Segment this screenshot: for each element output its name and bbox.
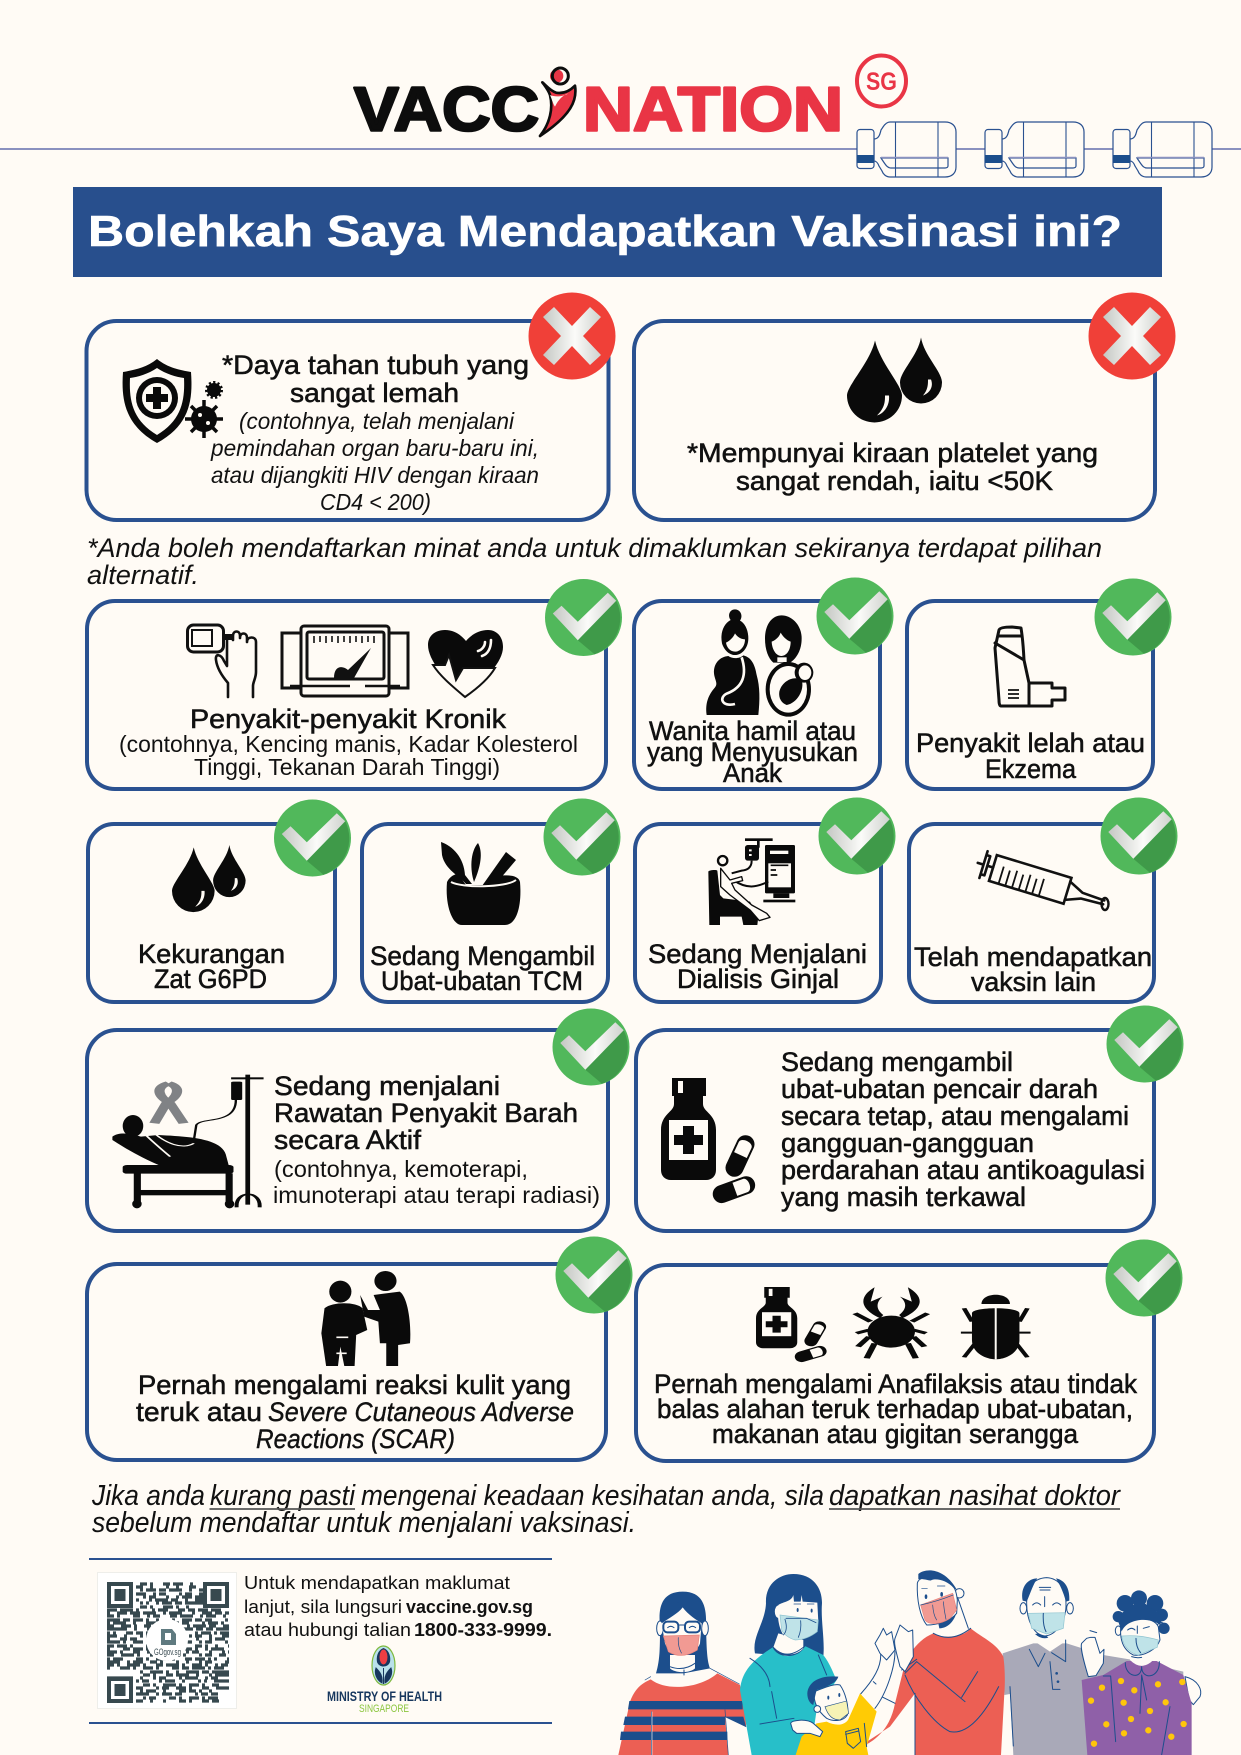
panel: G6PD deficiency [88, 800, 351, 1002]
text: anaphylaxis: makanan atau gigitan serangga [712, 1419, 1079, 1449]
note: alternative: *Anda boleh mendaftarkan minat anda untuk dimaklumkan sekiranya terdapat pilihan [87, 533, 1102, 563]
badge: check [274, 800, 351, 876]
icon: pregnant and nursing women [706, 609, 813, 717]
icon: blood drops [172, 845, 246, 912]
text: severe skin reaction: Reactions (SCAR) [256, 1424, 455, 1454]
text: blood thinners: gangguan-gangguan [781, 1128, 1034, 1158]
text: anaphylaxis: Pernah mengalami Anafilaksis atau tindak [654, 1369, 1137, 1399]
text: chronic illness: (contohnya, Kencing manis, Kadar Kolesterol [119, 731, 578, 757]
text: anaphylaxis: balas alahan teruk terhadap ubat-ubatan, [657, 1394, 1133, 1424]
icon: doctor examining patient [321, 1271, 410, 1366]
panel: severe skin reaction [87, 1236, 632, 1460]
text: cancer treatment: Sedang menjalani [274, 1071, 500, 1101]
badge: check [818, 798, 896, 874]
badge: check [1106, 1006, 1184, 1082]
logo word: VACC: VACC [354, 76, 539, 144]
title: Bolehkah Saya Mendapatkan Vaksinasi ini? [88, 207, 1122, 256]
text: severe skin reaction: teruk atau [136, 1397, 262, 1427]
footer rules [89, 1559, 552, 1723]
text: low platelets: *Mempunyai kiraan platelet yang [687, 438, 1098, 468]
text: severe skin reaction: Severe Cutaneous Adverse [268, 1397, 574, 1427]
icon: dialysis patient [708, 838, 795, 925]
text: blood thinners: yang masih terkawal [781, 1182, 1026, 1212]
text: cancer treatment: Rawatan Penyakit Barah [274, 1098, 578, 1128]
advice text: dapatkan nasihat doktor [829, 1480, 1121, 1512]
badge: cross [528, 292, 616, 380]
text: pregnant or breastfeeding [647, 716, 858, 788]
text: weak immunity: atau dijangkiti HIV dengan kiraan [211, 462, 539, 488]
text: dialysis: Sedang Menjalani [648, 939, 867, 969]
icon: syringe [974, 849, 1108, 915]
badge: cross [1088, 292, 1176, 380]
figure: child in yellow [791, 1628, 895, 1755]
text: asthma or eczema: Ekzema [985, 754, 1077, 784]
text: cancer treatment: imunoterapi atau terapi radiasi) [273, 1182, 600, 1208]
advice text: mengenai keadaan kesihatan anda, sila [361, 1480, 824, 1512]
logo figure [540, 68, 575, 136]
figure: woman in purple [1081, 1590, 1201, 1755]
icon: heart [428, 630, 503, 697]
contact text: Untuk mendapatkan maklumat [244, 1572, 510, 1593]
text: severe skin reaction: Pernah mengalami reaksi kulit yang [138, 1370, 571, 1400]
panel: anaphylaxis [636, 1240, 1182, 1461]
text: G6PD deficiency: Zat G6PD [154, 964, 267, 994]
text: TCM medication: Sedang Mengambil [370, 941, 595, 971]
text: chronic illness [119, 704, 578, 780]
text: low platelets [687, 438, 1098, 496]
panel: cancer treatment [87, 1008, 630, 1231]
text: G6PD deficiency [138, 939, 285, 994]
logo: Vaccination SG [354, 56, 906, 144]
panel: low platelets [634, 292, 1176, 520]
text: pregnant or breastfeeding: yang Menyusukan [647, 737, 858, 767]
badge: check [544, 798, 620, 876]
Ministry of Health logo [327, 1646, 442, 1715]
text: pregnant or breastfeeding: Wanita hamil atau [649, 716, 856, 746]
icon: crab [855, 1287, 928, 1358]
panel: blood thinners [636, 1006, 1184, 1231]
icon: blood pressure monitor [282, 626, 408, 696]
contact text [244, 1572, 552, 1640]
icon: medicine bottle and pills [661, 1078, 758, 1206]
text: weak immunity: (contohnya, telah menjalani [239, 408, 515, 434]
text: other vaccine: Telah mendapatkan [914, 942, 1152, 972]
emblem [372, 1646, 395, 1685]
figure: older man [1003, 1578, 1183, 1755]
text: blood thinners: Sedang mengambil [781, 1047, 1013, 1077]
text: low platelets: sangat rendah, iaitu <50K [736, 466, 1053, 496]
panel: pregnant or breastfeeding [634, 578, 894, 789]
contact text: 1800-333-9999. [414, 1619, 552, 1640]
text: pregnant or breastfeeding: Anak [723, 758, 782, 788]
icon: glucose meter and hand [188, 625, 256, 697]
title banner [73, 187, 1162, 277]
advice text [91, 1480, 1121, 1539]
text: G6PD deficiency: Kekurangan [138, 939, 285, 969]
text: dialysis [648, 939, 867, 994]
advice text: sebelum mendaftar untuk menjalani vaksinasi. [92, 1507, 636, 1539]
QR code [98, 1572, 236, 1708]
text: blood thinners: perdarahan atau antikoagulasi [781, 1155, 1145, 1185]
icon: blood drops [847, 338, 942, 422]
figure: woman in teal [740, 1574, 837, 1755]
text: TCM medication: Ubat-ubatan TCM [381, 966, 583, 996]
text: blood thinners: secara tetap, atau mengalami [781, 1101, 1129, 1131]
advice text: kurang pasti [210, 1480, 356, 1512]
note: alternative: alternatif. [87, 560, 199, 590]
panel: asthma or eczema [907, 578, 1172, 789]
header rule [0, 148, 1241, 150]
logo word: NATION: NATION [583, 76, 843, 144]
text: chronic illness: Penyakit-penyakit Kronik [190, 704, 507, 734]
badge: check [552, 1008, 630, 1086]
badge: check [1100, 798, 1178, 874]
contact text: vaccine.gov.sg [406, 1596, 533, 1617]
text: chronic illness: Tinggi, Tekanan Darah Tinggi) [194, 754, 500, 780]
text: dialysis: Dialisis Ginjal [677, 964, 839, 994]
text: cancer treatment: secara Aktif [274, 1125, 422, 1155]
panel: chronic illness [87, 579, 622, 789]
text: other vaccine [914, 942, 1152, 997]
figure: man in red [857, 1570, 1005, 1755]
illustration: masked family [618, 1570, 1201, 1755]
text: other vaccine: vaksin lain [971, 967, 1096, 997]
logo badge: SG: SG [866, 68, 897, 96]
badge: check [816, 578, 894, 654]
icon: medicine bottle and pills [756, 1287, 829, 1364]
text: weak immunity: *Daya tahan tubuh yang [222, 350, 529, 380]
figure: woman with stripes [618, 1592, 747, 1755]
panel: weak immunity [86, 292, 616, 520]
text: cancer treatment: (contohnya, kemoterapi, [274, 1156, 528, 1182]
text: blood thinners: ubat-ubatan pencair darah [781, 1074, 1098, 1104]
badge: check [1094, 578, 1172, 656]
logo badge: SG [857, 56, 906, 106]
panel: dialysis [635, 798, 896, 1002]
Ministry of Health logo: SINGAPORE [359, 1703, 409, 1715]
text: anaphylaxis [654, 1369, 1137, 1449]
text: weak immunity [210, 350, 539, 515]
text: weak immunity: pemindahan organ baru-baru ini, [210, 435, 539, 461]
advice text: Jika anda [91, 1480, 205, 1512]
vial row [857, 122, 1212, 177]
text: TCM medication [370, 941, 595, 996]
text: asthma or eczema [916, 728, 1145, 784]
text: cancer treatment [273, 1071, 600, 1208]
QR finder squares [107, 1582, 229, 1703]
Ministry of Health logo: MINISTRY OF HEALTH [327, 1688, 442, 1704]
note: alternative [87, 533, 1102, 590]
text: blood thinners [781, 1047, 1145, 1212]
text: weak immunity: sangat lemah [290, 378, 459, 408]
panel: other vaccine [909, 798, 1178, 1002]
icon: patient on bed with IV [112, 1075, 264, 1208]
icon: beetle [961, 1295, 1031, 1359]
badge: check [1106, 1240, 1182, 1316]
QR centre logo: GOgov.sg [154, 1647, 181, 1657]
badge: check [556, 1236, 632, 1314]
contact text: lanjut, sila lungsuri [244, 1596, 402, 1617]
icon: shield with viruses [123, 359, 223, 443]
icon: mortar and herbs [441, 842, 520, 925]
icon: inhaler [995, 627, 1065, 706]
text: severe skin reaction [136, 1370, 574, 1454]
contact text: atau hubungi talian [244, 1619, 411, 1640]
text: asthma or eczema: Penyakit lelah atau [916, 728, 1145, 758]
badge: check [545, 579, 622, 656]
panel: TCM medication [362, 798, 620, 1002]
text: weak immunity: CD4 < 200) [320, 489, 431, 515]
